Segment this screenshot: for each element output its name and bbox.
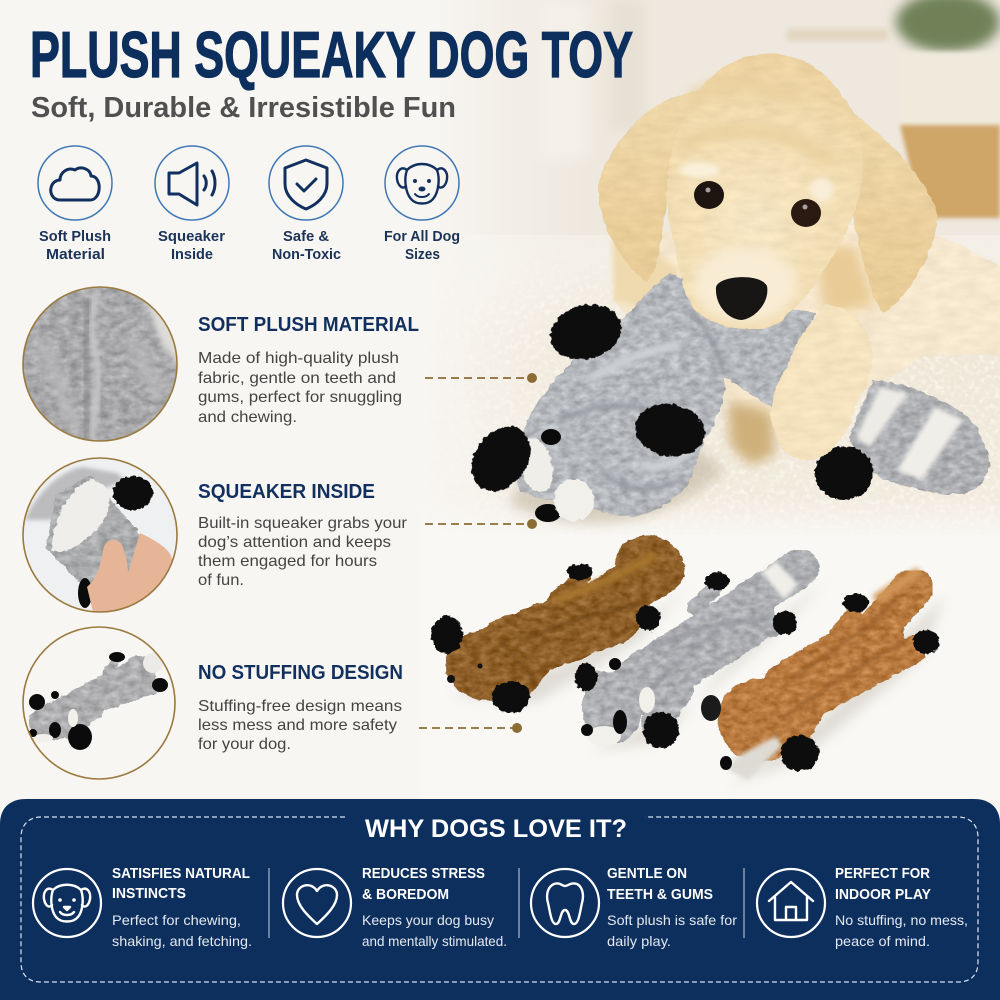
icon: heart [283,869,351,937]
section: no stuffing design [198,662,403,753]
circle photo: plush fur close-up [22,286,178,442]
label: for all dog sizes: Sizes [405,247,440,263]
benefit: perfect for indoor play: PERFECT FOR [835,865,930,882]
puppy right ear [825,95,938,314]
subtitle: Soft, Durable & Irresistible Fun [31,92,456,124]
panel: why dogs love it [0,799,1000,1000]
benefit: satisfies natural instincts: INSTINCTS [112,885,186,902]
puppy photo [598,90,1000,465]
brown beaver toy [431,526,693,713]
puppy eyes [694,181,821,227]
section: soft plush material: SOFT PLUSH MATERIAL [198,314,419,336]
section: soft plush material: and chewing. [198,409,297,426]
section: squeaker inside: of fun. [198,572,244,589]
feature icon row [38,146,460,263]
section: squeaker inside: SQUEAKER INSIDE [198,481,375,503]
gray raccoon toy [575,561,800,748]
toy black foot [631,398,709,462]
callout line: squeaker [425,519,537,529]
label: for all dog sizes: For All Dog [384,229,460,245]
section: squeaker inside: them engaged for hours [198,553,377,570]
puppy paw [771,305,873,460]
shadows [450,580,945,785]
icon: dog [33,869,101,937]
three toy products [431,526,945,785]
benefit: satisfies natural instincts: Perfect for chewing, [112,912,241,928]
orange fox toy [701,572,939,780]
label: squeaker inside [158,229,225,263]
benefit: gentle on teeth and gums [531,865,737,949]
benefit: reduces stress and boredom: REDUCES STRESS [362,865,485,882]
benefit: perfect for indoor play: INDOOR PLAY [835,886,931,903]
section: no stuffing design: NO STUFFING DESIGN [198,662,403,684]
toy tail [849,380,990,494]
benefit: gentle on teeth and gums: Soft plush is safe for [607,912,737,928]
section: soft plush material: gums, perfect for snuggling [198,389,402,406]
toy body [518,273,815,517]
circle photo: flat toy without stuffing [20,625,180,785]
benefit: perfect for indoor play: peace of mind. [835,933,930,949]
benefit: satisfies natural instincts: shaking, and fetching. [112,933,252,949]
toy black foot [815,446,873,500]
section: squeaker inside: Built-in squeaker grabs your [198,515,408,532]
gray raccoon toy held by puppy [460,273,990,523]
puppy body [613,220,1000,420]
toy white cheek and muzzle [513,429,594,522]
benefit: perfect for indoor play: No stuffing, no mess, [835,912,968,928]
label: soft plush material: Material [46,247,105,263]
benefit: satisfies natural instincts [33,865,252,949]
banner heading: WHY DOGS LOVE IT? [365,815,627,843]
benefit: perfect for indoor play [757,865,968,949]
title: PLUSH SQUEAKY DOG TOY [30,18,633,91]
icon: shield check [269,146,343,220]
section: no stuffing design: Stuffing-free design means [198,698,402,715]
label: squeaker inside: Squeaker [158,229,225,245]
benefit: reduces stress and boredom: & BOREDOM [362,886,449,903]
icon: speaker [155,146,229,220]
section: no stuffing design: for your dog. [198,736,291,753]
background photo: room and carpet [420,0,1000,800]
section: soft plush material [198,314,419,426]
label: for all dog sizes [384,229,460,263]
benefit: reduces stress and boredom: and mentally stimulated. [362,933,507,949]
icon: house [757,869,825,937]
toy black ear [544,297,628,367]
icon: soft plush cloud [38,146,112,220]
puppy left ear [598,90,705,282]
icon: dog face [385,146,459,220]
puppy nose [716,277,767,320]
benefit: gentle on teeth and gums: TEETH & GUMS [607,886,713,903]
circle photo: squeezing squeaker [20,455,180,615]
label: soft plush material: Soft Plush [39,229,111,245]
benefit: reduces stress and boredom [283,865,507,949]
callout line: soft plush [425,373,537,383]
section: soft plush material: fabric, gentle on teeth and [198,370,396,387]
icon: tooth [531,869,599,937]
section: squeaker inside: dog’s attention and keeps [198,534,391,551]
benefit: satisfies natural instincts: SATISFIES NATURAL [112,865,250,882]
label: safe and non-toxic [272,229,341,263]
benefit: reduces stress and boredom: Keeps your dog busy [362,912,494,928]
callout line: no stuffing [419,723,522,733]
label: safe and non-toxic: Non-Toxic [272,247,341,263]
label: soft plush material [39,229,111,263]
label: safe and non-toxic: Safe & [283,229,330,245]
toy black paw [460,415,542,503]
benefit: gentle on teeth and gums: daily play. [607,933,671,949]
section: no stuffing design: less mess and more safety [198,717,397,734]
puppy head [666,53,863,329]
section: soft plush material: Made of high-quality plush [198,350,399,367]
benefit: gentle on teeth and gums: GENTLE ON [607,865,687,882]
section: squeaker inside [198,481,408,589]
label: squeaker inside: Inside [171,247,213,263]
